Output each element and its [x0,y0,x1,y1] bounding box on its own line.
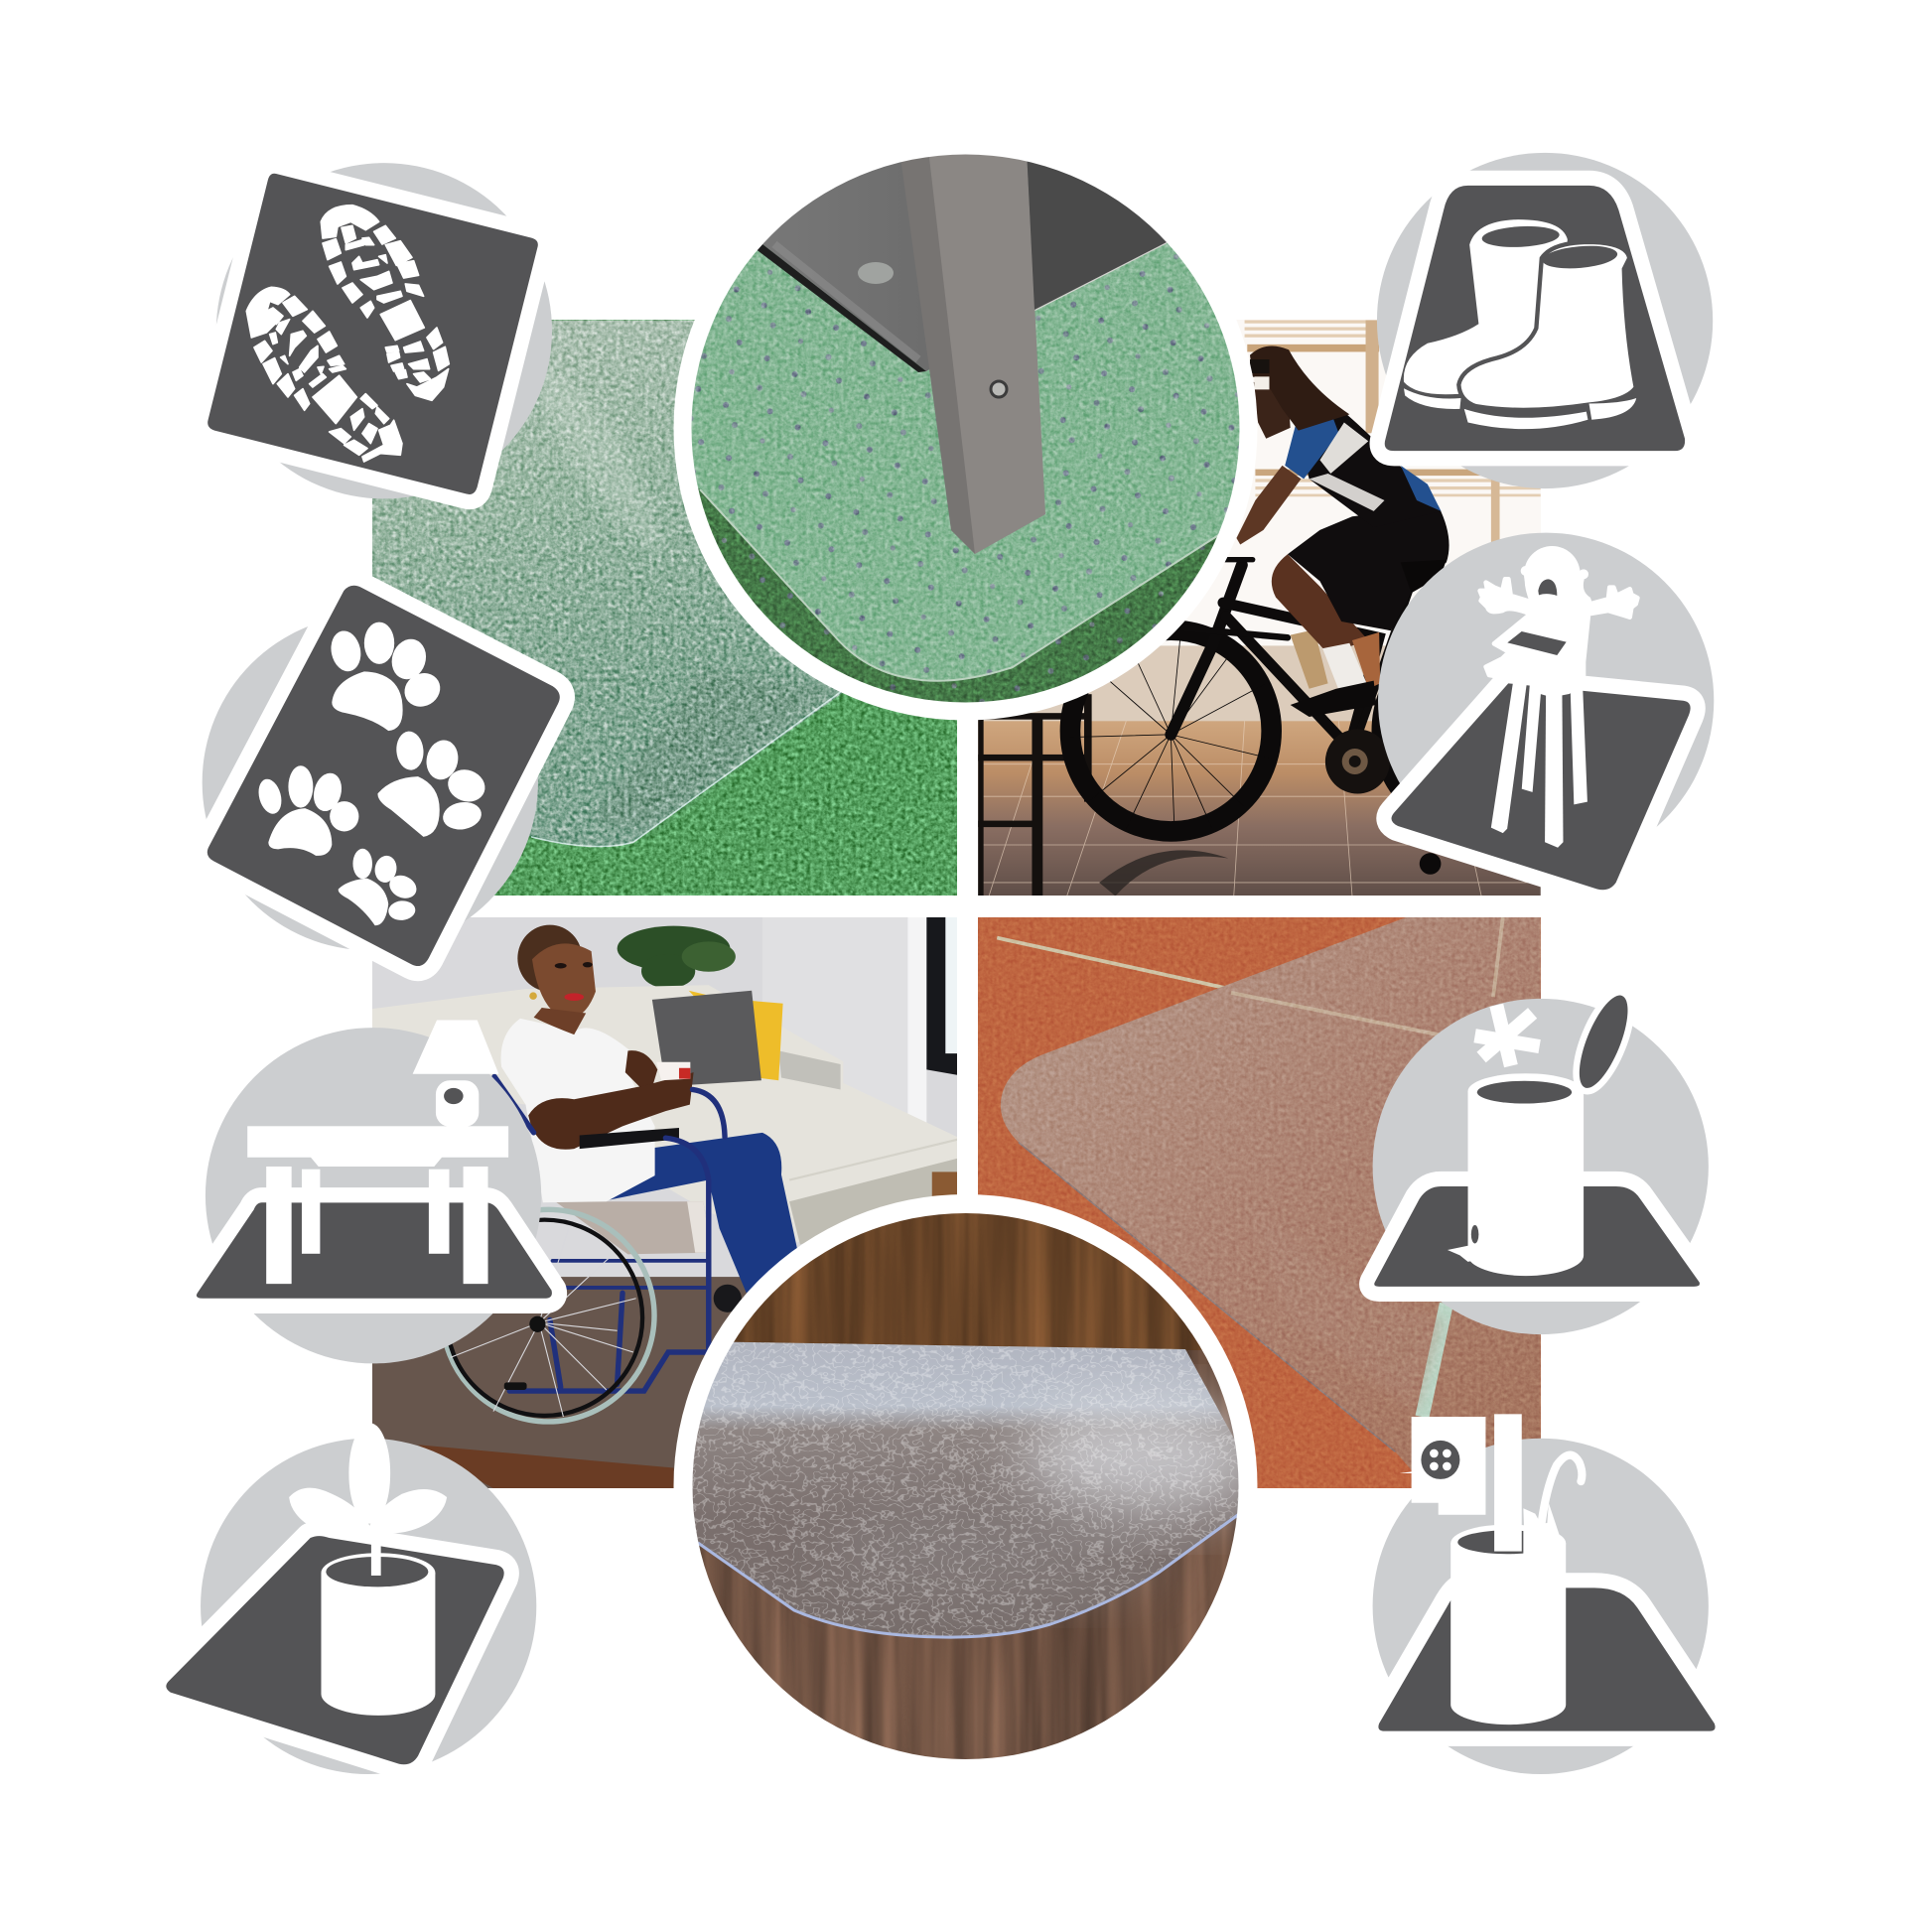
woman [607,1133,797,1293]
cyclist [1236,466,1301,545]
icon: tipped cup with lid on mat [1373,990,1709,1334]
table legs [978,694,1092,896]
icon: paw prints on mat [203,586,560,966]
front bicycle wheel [1069,630,1272,834]
child [1480,546,1637,695]
umbrella [1541,1455,1582,1530]
photo: cyclist on indoor trainer [978,320,1582,896]
high chair legs [1491,678,1587,848]
photo: frosted mat corner on terracotta tile [978,917,1541,1488]
houseplant [618,926,736,989]
circle photo: mat under table leg on carpet [673,137,1257,725]
wheelchair seat panel [555,1201,711,1254]
wheelchair wheel [442,1209,654,1422]
socket panel [1400,1417,1485,1515]
left boot [1404,219,1568,394]
circle photo: textured mat close-up on wood [673,1194,1261,1778]
bicycle frame [1171,560,1409,743]
lid [1570,990,1637,1094]
wheelchair frame [580,1128,679,1149]
left boot print [246,287,402,462]
asterisk [1475,1005,1540,1066]
icon: child on high chair on mat [1378,533,1714,890]
icon: side table and lamp on mat [197,1021,552,1363]
icon: cup with umbrella and socket on mat [1373,1414,1716,1774]
photo: woman in wheelchair on floor mat [372,917,959,1492]
photo: clear mat on green carpet [372,320,957,896]
sofa [372,985,957,1245]
sprout [290,1424,446,1533]
right boot [1458,242,1636,410]
right boot print [321,206,449,400]
icon: candle plant pot on mat [166,1424,536,1774]
icon: rubber boots on mat [1377,153,1713,488]
icon: boot prints on mat [207,163,552,498]
